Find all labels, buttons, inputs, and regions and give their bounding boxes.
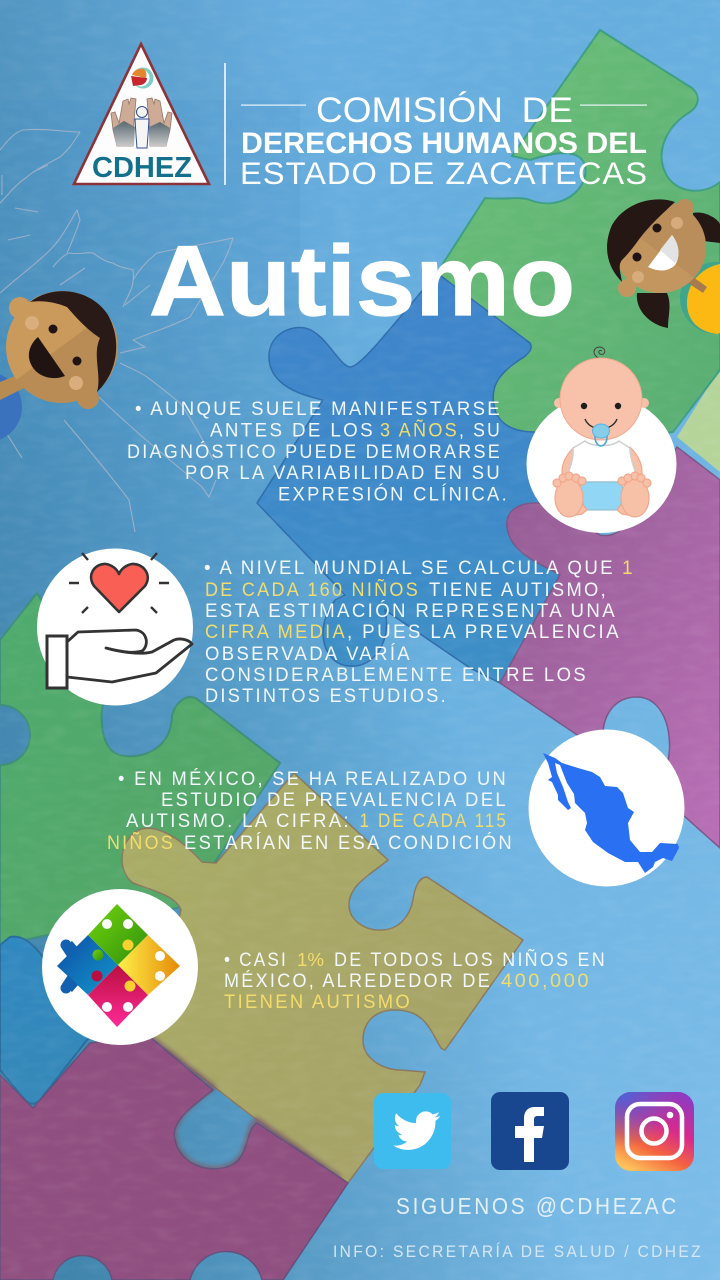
text block: fourth fact [224, 949, 607, 1013]
text block: first fact: POR LA VARIABILIDAD EN SU [185, 463, 502, 484]
logo acronym: CDHEZ [92, 152, 192, 184]
text block: second fact: TIENE AUTISMO, [429, 580, 608, 601]
text block: second fact [204, 558, 633, 707]
text block: fourth fact: TIENEN AUTISMO [224, 992, 412, 1013]
text block: fourth fact: MÉXICO, ALREDEDOR DE [224, 971, 492, 992]
text block: second fact: , PUES LA PREVALENCIA [347, 622, 621, 643]
text block: second fact: OBSERVADA VARÍA [205, 644, 412, 665]
text block: fourth fact: 400,000 [501, 971, 591, 992]
heart rays [69, 553, 169, 613]
baby head [554, 358, 649, 440]
header: organisation name: ESTADO DE ZACATECAS [240, 155, 648, 191]
text block: third fact: ESTARÍAN EN ESA CONDICIÓN [184, 832, 514, 854]
blue piece [57, 935, 118, 995]
header divider [224, 63, 226, 185]
icon: heart in hand circle [37, 548, 193, 706]
text block: second fact: DE CADA 160 NIÑOS [205, 579, 420, 601]
leaf sketch lines [0, 129, 233, 532]
puzzle piece: right purple [500, 447, 720, 848]
icon: baby in circle [526, 347, 676, 533]
text block: third fact [107, 769, 514, 854]
text block: second fact: ESTA ESTIMACIÓN REPRESENTA UNA [205, 600, 617, 622]
icon: Instagram [615, 1092, 694, 1171]
puzzle piece: left green [0, 593, 280, 945]
text block: first fact: 3 AÑOS [380, 420, 459, 442]
source credit: INFO: SECRETARÍA DE SALUD / CDHEZ [333, 1242, 703, 1261]
text block: fourth fact: DE TODOS LOS NIÑOS EN [334, 949, 607, 971]
text block: third fact: 1 DE CADA 115 [360, 811, 508, 832]
text block: third fact: AUTISMO. LA CIFRA: [126, 811, 351, 832]
puzzle piece: light green [677, 368, 720, 472]
puzzle notches [102, 919, 165, 1012]
text block: second fact: DISTINTOS ESTUDIOS. [205, 686, 448, 707]
baby legs and feet [553, 472, 651, 517]
text block: fourth fact: • CASI [224, 950, 288, 971]
baby arms [562, 447, 642, 478]
text block: third fact: NIÑOS [107, 832, 175, 854]
header: organisation name: COMISIÓN DE [316, 91, 573, 130]
icon: girl in puzzle [607, 190, 720, 334]
text block: second fact: • A NIVEL MUNDIAL SE CALCULA QUE [204, 558, 615, 579]
logo figure [135, 106, 149, 148]
text block: first fact: , SU [459, 420, 502, 442]
text block: second fact: CONSIDERABLEMENTE ENTRE LOS [205, 665, 588, 686]
icon: Facebook [491, 1092, 569, 1170]
social handle: SIGUENOS @CDHEZAC [396, 1193, 679, 1219]
text block: first fact: ANTES DE LOS [210, 420, 375, 442]
logo sun [131, 68, 154, 88]
yellow piece [118, 935, 180, 995]
icon: map of Mexico in circle [528, 730, 684, 886]
text block: first fact [127, 399, 509, 506]
red piece [88, 965, 148, 1027]
text block: third fact: • EN MÉXICO, SE HA REALIZADO UN [118, 769, 508, 790]
puzzle piece: blue centre [257, 273, 600, 683]
baby curl [594, 347, 605, 359]
logo: CDHEZ triangle [74, 44, 209, 184]
header: organisation name: DERECHOS HUMANOS DEL [241, 127, 647, 160]
puzzle piece: bottom-left blue [0, 937, 130, 1104]
puzzle piece: top green [437, 30, 720, 440]
header: organisation name [240, 91, 648, 191]
puzzle piece: olive [122, 773, 523, 1183]
icon: Twitter [374, 1093, 451, 1169]
heart [91, 564, 148, 612]
green piece [88, 904, 148, 965]
icon: boy in puzzle [0, 291, 118, 440]
text block: first fact: • AUNQUE SUELE MANIFESTARSE [135, 399, 502, 420]
baby pacifier [592, 424, 610, 446]
baby diaper [577, 482, 627, 510]
cuff [47, 636, 67, 688]
text block: first fact: EXPRESIÓN CLÍNICA. [278, 484, 509, 506]
text block: second fact: CIFRA MEDIA [205, 622, 347, 643]
title: Autismo [149, 225, 575, 336]
puzzle piece shadow [150, 1037, 340, 1178]
hand [67, 630, 192, 682]
text block: third fact: ESTUDIO DE PREVALENCIA DEL [161, 790, 508, 811]
baby vest [567, 441, 637, 482]
logo hands [111, 98, 172, 146]
icon: four-piece puzzle in circle [42, 889, 198, 1045]
text block: first fact: DIAGNÓSTICO PUEDE DEMORARSE [127, 441, 502, 463]
text block: second fact: 1 [622, 558, 633, 579]
text block: fourth fact: 1% [297, 950, 324, 970]
puzzle piece: bottom purple [0, 1037, 348, 1280]
